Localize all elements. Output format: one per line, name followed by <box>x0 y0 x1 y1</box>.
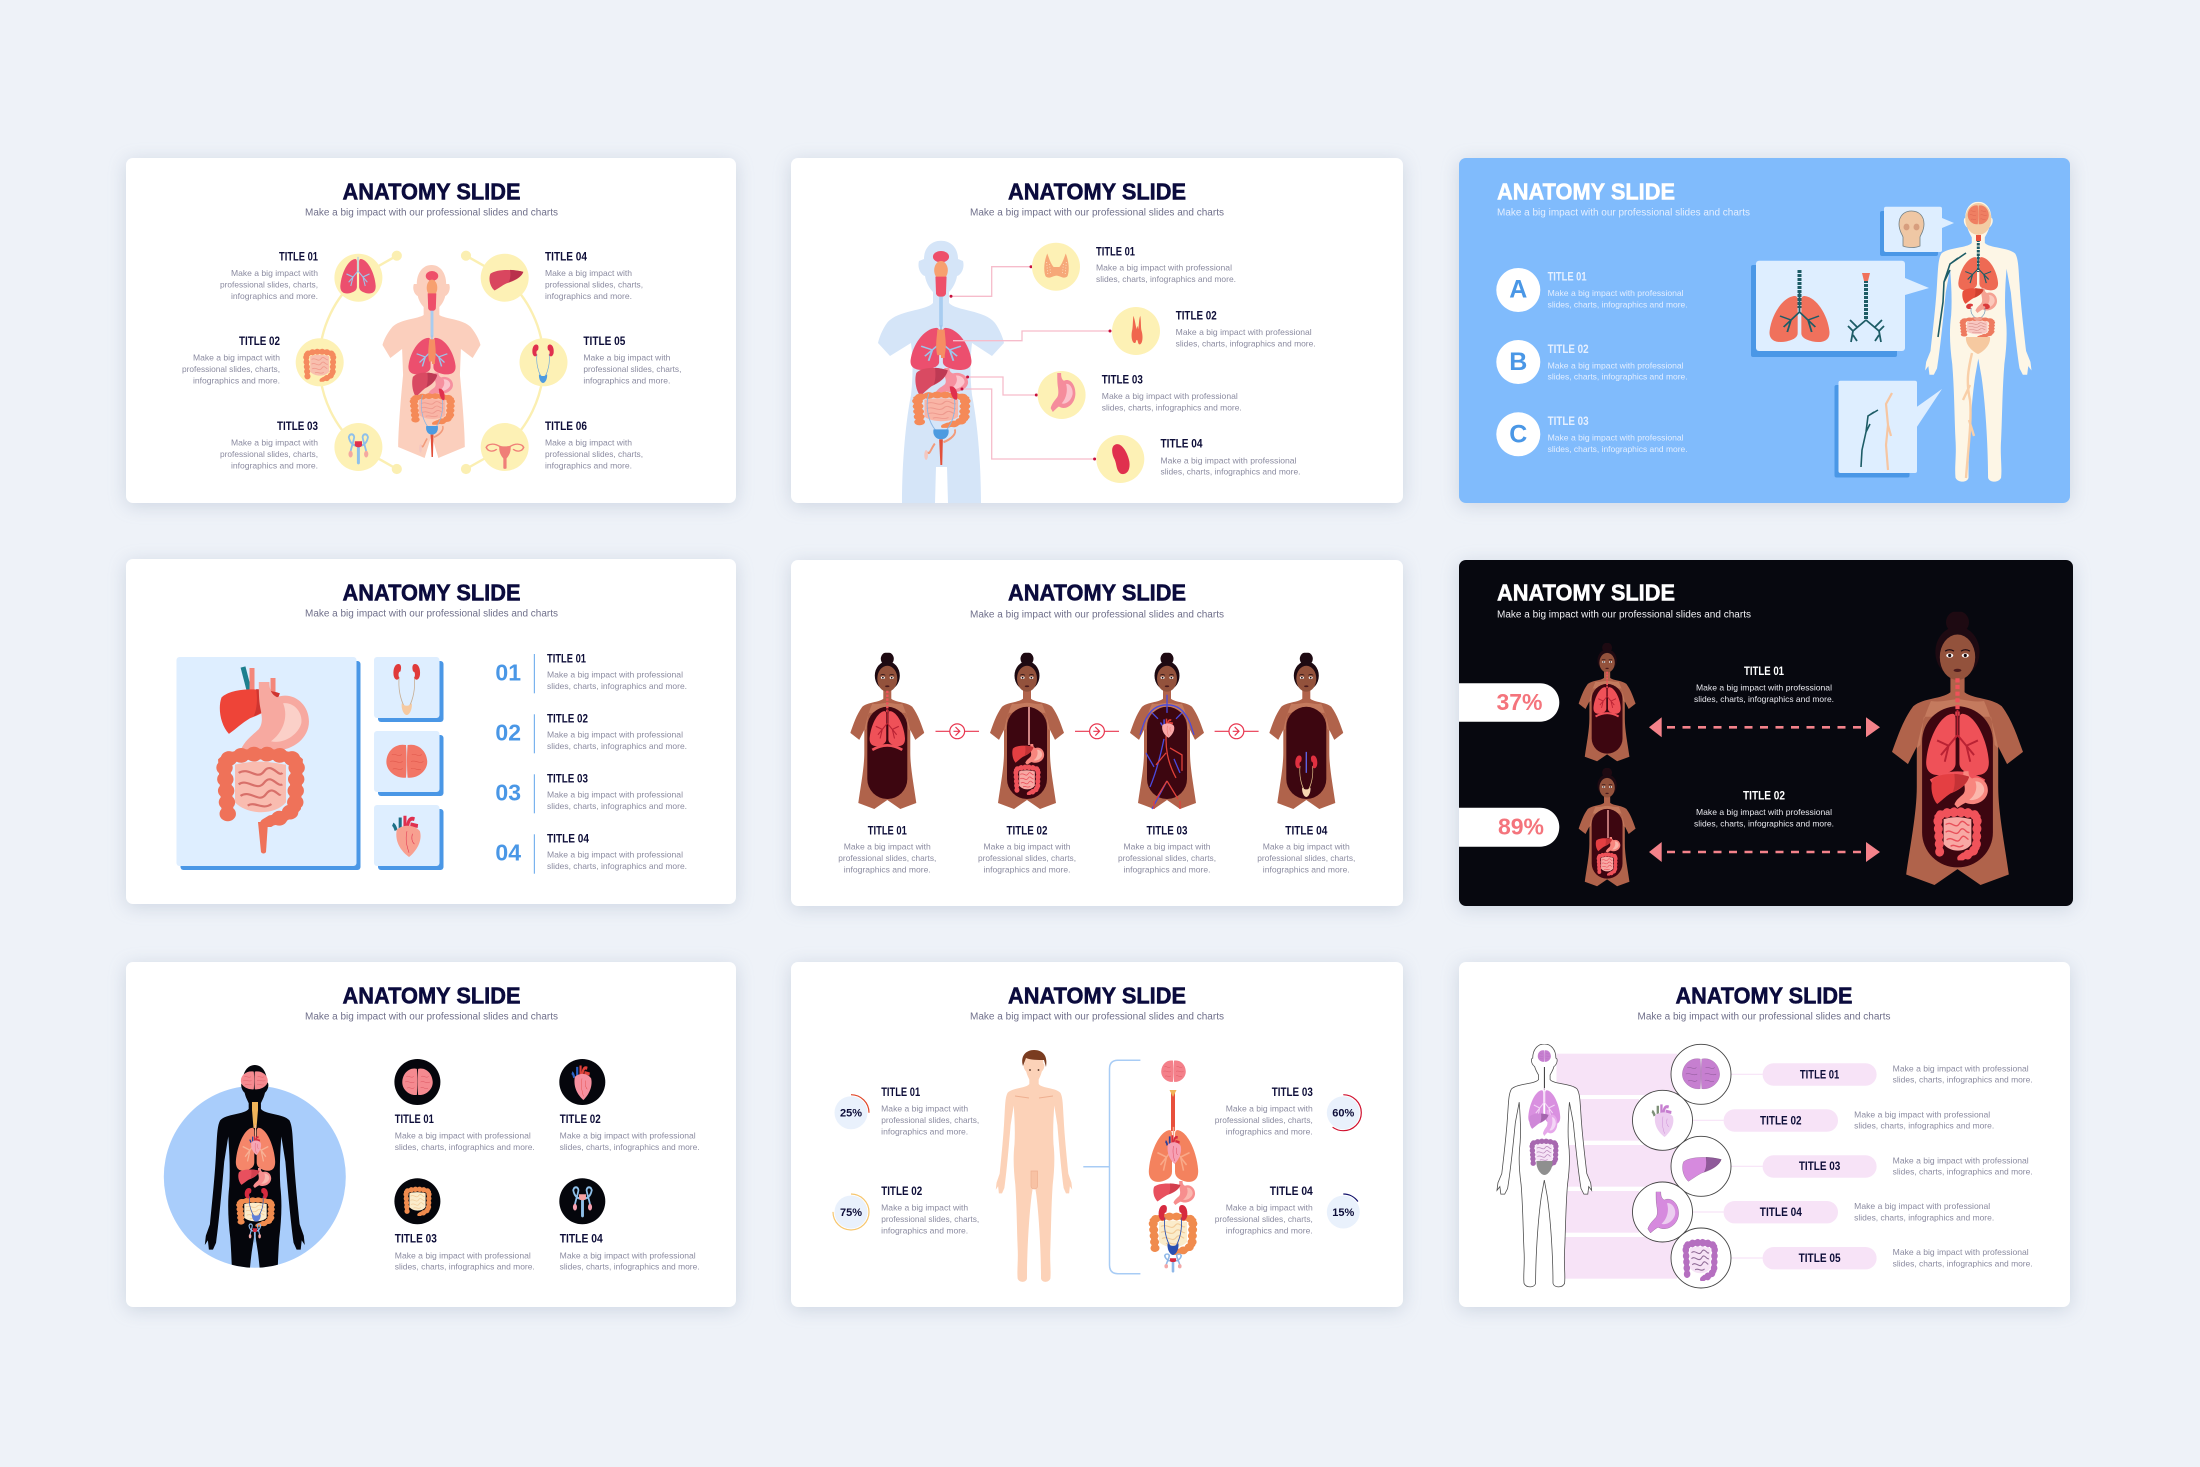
icon: trachea lobes <box>1112 307 1160 355</box>
icon: heart <box>1632 1090 1692 1150</box>
stat pill 37% <box>1459 683 1559 722</box>
list item 04: TITLE 04 <box>547 831 589 845</box>
icon: spleen <box>1096 435 1144 483</box>
text: title 02: infographics and more. <box>193 376 280 386</box>
subtitle: Make a big impact with our professional slides and charts <box>970 208 1224 219</box>
central figure with organs <box>382 265 480 458</box>
text: title 06: infographics and more. <box>545 460 632 470</box>
gauge 25% <box>833 1095 869 1131</box>
stat pill 37%: 37% <box>1496 689 1543 715</box>
text: title 03: professional slides, charts, <box>1118 853 1216 863</box>
list item 02: 02 <box>495 720 521 746</box>
text: title 01 <box>838 823 936 875</box>
text: title 02: Make a big impact with professional <box>560 1131 696 1141</box>
badge B with text: B <box>1509 348 1527 376</box>
double arrow 2 <box>1649 842 1880 862</box>
text: title 03: TITLE 03 <box>1102 373 1143 387</box>
text: title 03: professional slides, charts, <box>1215 1115 1313 1125</box>
panel: slide 9 purple list <box>1459 962 2070 1307</box>
text: title 03: TITLE 03 <box>395 1231 437 1245</box>
text row 5: Make a big impact with professional <box>1893 1247 2029 1257</box>
text: title 01: infographics and more. <box>231 291 318 301</box>
icon: male reproductive <box>559 1178 605 1224</box>
pill title 03 <box>1763 1155 1877 1178</box>
badge A with text <box>1496 268 1688 312</box>
text row 1: slides, charts, infographics and more. <box>1893 1075 2033 1085</box>
text: title 03: Make a big impact with <box>1226 1104 1313 1114</box>
text: title 04: infographics and more. <box>1263 865 1350 875</box>
text: title 04: Make a big impact with <box>545 268 632 278</box>
text row 2: slides, charts, infographics and more. <box>1854 1121 1994 1131</box>
text: title 02 <box>182 334 280 386</box>
text: title 01: professional slides, charts, <box>838 853 936 863</box>
text: title 04: professional slides, charts, <box>1215 1214 1313 1224</box>
list item 04: Make a big impact with professional <box>547 850 683 860</box>
list item 02 <box>495 711 687 753</box>
text: title 01: Make a big impact with <box>231 268 318 278</box>
organ stack <box>1149 1060 1198 1273</box>
text: title 02 <box>978 823 1076 875</box>
text: title 01: Make a big impact with <box>881 1104 969 1114</box>
text row 1: Make a big impact with professional <box>1893 1063 2029 1073</box>
arrow 3 <box>1215 724 1259 739</box>
text: title 02: TITLE 02 <box>1743 789 1785 803</box>
list item 01 <box>495 651 687 693</box>
text: title 02: slides, charts, infographics and more. <box>1176 338 1316 348</box>
badge A with text: slides, charts, infographics and more. <box>1548 299 1688 309</box>
text: title 06 <box>545 419 643 470</box>
text: title 03: infographics and more. <box>231 460 318 470</box>
text: title 03: Make a big impact with professional <box>1102 391 1238 401</box>
text: title 02: TITLE 02 <box>560 1112 601 1126</box>
text row 3 <box>1893 1155 2033 1177</box>
gauge 25%: 25% <box>840 1108 862 1120</box>
text: title 03: TITLE 03 <box>277 419 318 433</box>
text row 3: Make a big impact with professional <box>1893 1155 2029 1165</box>
double arrow 1 <box>1649 717 1880 737</box>
list item 01: 01 <box>495 660 521 686</box>
pill title 03: TITLE 03 <box>1799 1159 1841 1173</box>
text: title 04: professional slides, charts, <box>545 279 643 289</box>
icon: stomach <box>1038 371 1086 419</box>
badge B with text: TITLE 02 <box>1548 342 1589 356</box>
figure: digestive <box>990 652 1064 809</box>
yellow ring with connector dots <box>319 251 544 474</box>
text: title 02: Make a big impact with <box>984 842 1071 852</box>
pill title 02: TITLE 02 <box>1760 1113 1802 1127</box>
pill title 01: TITLE 01 <box>1800 1067 1840 1081</box>
subtitle: Make a big impact with our professional slides and charts <box>1497 208 1750 219</box>
text: title 03 <box>395 1231 535 1272</box>
subtitle: Make a big impact with our professional slides and charts <box>1497 610 1751 621</box>
text row 4: slides, charts, infographics and more. <box>1854 1212 1994 1222</box>
text row 1 <box>1893 1063 2033 1085</box>
icon: colon <box>296 338 344 386</box>
arrow 1 <box>936 724 979 739</box>
gauge 15%: 15% <box>1332 1207 1355 1219</box>
list item 02: slides, charts, infographics and more. <box>547 741 687 751</box>
text: title 01: TITLE 01 <box>395 1112 434 1126</box>
icon: liver <box>481 254 529 302</box>
text: title 02: slides, charts, infographics and more. <box>560 1142 700 1152</box>
text: title 04: slides, charts, infographics and more. <box>1160 466 1300 476</box>
text: title 04: infographics and more. <box>545 291 632 301</box>
small figure: lungs <box>1579 643 1636 761</box>
icon: colon <box>394 1178 440 1224</box>
gauge 75%: 75% <box>840 1207 862 1219</box>
text: title 05: professional slides, charts, <box>583 364 681 374</box>
text: title 01: infographics and more. <box>844 865 931 875</box>
badge B with text: slides, charts, infographics and more. <box>1548 372 1688 382</box>
text: title 06: Make a big impact with <box>545 437 632 447</box>
text: title 01 <box>220 250 318 301</box>
pill title 05: TITLE 05 <box>1799 1251 1841 1265</box>
text: title 04 <box>1215 1184 1313 1236</box>
icon: kidneys <box>520 338 568 386</box>
gauge 75% <box>833 1194 869 1230</box>
icon: lungs <box>334 254 382 302</box>
list item 02: TITLE 02 <box>547 711 588 725</box>
text: title 03 <box>1215 1085 1313 1137</box>
text: title 01: Make a big impact with professional <box>1696 682 1832 692</box>
text: title 01: TITLE 01 <box>1744 664 1784 678</box>
blue body with organs <box>878 241 1004 503</box>
text: title 04: Make a big impact with <box>1263 842 1350 852</box>
text: title 04 <box>1257 823 1355 875</box>
panel: slide 6 dark percentages <box>1459 560 2073 906</box>
outline body with purple organs <box>1497 1044 1592 1287</box>
pill title 02 <box>1724 1109 1838 1132</box>
pill title 05 <box>1763 1247 1877 1269</box>
text: title 04: Make a big impact with <box>1226 1203 1313 1213</box>
list item 04 <box>495 831 687 874</box>
list item 01: TITLE 01 <box>547 651 586 665</box>
pill title 01 <box>1763 1063 1877 1086</box>
text row 5 <box>1893 1247 2033 1268</box>
title: ANATOMY SLIDE <box>1497 178 1675 204</box>
text: title 01: slides, charts, infographics and more. <box>1694 694 1834 704</box>
text: title 03: Make a big impact with <box>231 437 318 447</box>
arrow 2 <box>1075 724 1119 739</box>
list item 04: slides, charts, infographics and more. <box>547 861 687 871</box>
text: title 02: Make a big impact with <box>193 353 280 363</box>
text: title 01: Make a big impact with professional <box>1096 263 1232 273</box>
text: title 01: slides, charts, infographics and more. <box>395 1142 535 1152</box>
text: title 02: TITLE 02 <box>1006 823 1048 837</box>
callout: lungs and bronchi <box>1751 261 1929 357</box>
text: title 04: Make a big impact with professional <box>560 1250 696 1260</box>
list item 01: slides, charts, infographics and more. <box>547 681 687 691</box>
text: title 02 <box>1694 789 1834 829</box>
text: title 03: infographics and more. <box>1226 1127 1313 1137</box>
text: title 01: TITLE 01 <box>1096 244 1135 258</box>
title: ANATOMY SLIDE <box>1008 178 1186 204</box>
text: title 02: Make a big impact with professional <box>1176 327 1312 337</box>
callout: skull <box>1880 207 1954 256</box>
panel: slide 1 organ ring <box>126 158 736 503</box>
large organ card <box>176 657 360 870</box>
text: title 03 <box>220 419 318 470</box>
text: title 04: TITLE 04 <box>560 1231 603 1245</box>
small card: kidneys <box>374 657 444 722</box>
text: title 02: Make a big impact with professional <box>1696 807 1832 817</box>
text: title 02 <box>1176 309 1316 348</box>
text: title 05: infographics and more. <box>583 376 670 386</box>
text: title 02: infographics and more. <box>881 1226 968 1236</box>
list item 03: Make a big impact with professional <box>547 790 683 800</box>
panel: slide 4 digestive organs <box>126 559 736 904</box>
text: title 02 <box>881 1184 979 1236</box>
text: title 04: TITLE 04 <box>1270 1184 1313 1198</box>
text: title 01: slides, charts, infographics and more. <box>1096 274 1236 284</box>
stat pill 89%: 89% <box>1498 813 1544 839</box>
connectors <box>1692 1074 1763 1258</box>
list item 03: TITLE 03 <box>547 771 588 785</box>
subtitle: Make a big impact with our professional slides and charts <box>305 208 558 219</box>
text row 5: slides, charts, infographics and more. <box>1893 1258 2033 1268</box>
icon: uterus <box>481 423 529 471</box>
list item 03: slides, charts, infographics and more. <box>547 801 687 811</box>
title: ANATOMY SLIDE <box>342 580 520 606</box>
text: title 01 <box>1096 244 1236 284</box>
subtitle: Make a big impact with our professional slides and charts <box>305 1012 558 1023</box>
text: title 05 <box>583 334 681 386</box>
badge C with text: TITLE 03 <box>1548 414 1589 428</box>
text row 3: slides, charts, infographics and more. <box>1893 1167 2033 1177</box>
panel: slide 8 gauges and bracket <box>791 962 1403 1307</box>
badge C with text: slides, charts, infographics and more. <box>1548 444 1688 454</box>
text: title 02: TITLE 02 <box>1176 309 1217 323</box>
list item 04: 04 <box>495 840 521 866</box>
text: title 02: professional slides, charts, <box>881 1214 979 1224</box>
badge B with text: Make a big impact with professional <box>1548 360 1684 370</box>
text: title 04: Make a big impact with professional <box>1160 455 1297 465</box>
subtitle: Make a big impact with our professional slides and charts <box>970 610 1224 621</box>
list item 03: 03 <box>495 780 521 806</box>
text: title 04: infographics and more. <box>1226 1226 1313 1236</box>
gauge 60% <box>1325 1095 1361 1131</box>
title: ANATOMY SLIDE <box>342 178 520 204</box>
text: title 03 <box>1102 373 1242 412</box>
leader lines <box>950 265 1112 460</box>
text: title 01: Make a big impact with <box>844 842 931 852</box>
text row 2: Make a big impact with professional <box>1854 1109 1990 1119</box>
text: title 02: Make a big impact with <box>881 1203 969 1213</box>
text: title 03: TITLE 03 <box>1146 823 1188 837</box>
small card: brain <box>374 731 444 796</box>
icon: thyroid <box>1032 243 1080 291</box>
text: title 01 <box>881 1085 979 1137</box>
text: title 03 <box>1118 823 1216 875</box>
badge B with text <box>1496 340 1688 384</box>
text: title 02: professional slides, charts, <box>182 364 280 374</box>
bracket <box>1083 1060 1140 1274</box>
small figure: digestive <box>1579 768 1636 886</box>
icon: heart <box>559 1059 605 1105</box>
text: title 01: professional slides, charts, <box>881 1115 979 1125</box>
text: title 01 <box>1694 664 1834 704</box>
list item 02: Make a big impact with professional <box>547 730 683 740</box>
badge A with text: A <box>1509 276 1527 304</box>
text: title 02: professional slides, charts, <box>978 853 1076 863</box>
cream full body with organs <box>1925 202 2032 482</box>
gauge 15% <box>1325 1194 1361 1230</box>
pill title 04: TITLE 04 <box>1760 1205 1802 1219</box>
icon: liver <box>1671 1136 1731 1196</box>
subtitle: Make a big impact with our professional slides and charts <box>1638 1012 1890 1023</box>
title: ANATOMY SLIDE <box>1008 580 1186 606</box>
text row 4 <box>1854 1201 1994 1222</box>
panel: slide 5 four female figures <box>791 560 1403 906</box>
text: title 01: professional slides, charts, <box>220 279 318 289</box>
text: title 01 <box>395 1112 535 1152</box>
text: title 05: TITLE 05 <box>583 334 626 348</box>
badge C with text: C <box>1509 420 1527 448</box>
gauge 60%: 60% <box>1332 1108 1355 1120</box>
text: title 02 <box>560 1112 700 1152</box>
text: title 01: TITLE 01 <box>279 250 318 264</box>
text: title 01: infographics and more. <box>881 1127 968 1137</box>
text: title 01: TITLE 01 <box>868 823 907 837</box>
list item 03 <box>495 771 687 813</box>
badge C with text: Make a big impact with professional <box>1548 433 1684 443</box>
text: title 04 <box>1160 437 1300 476</box>
badge A with text: Make a big impact with professional <box>1548 288 1684 298</box>
icon: brain <box>394 1059 440 1105</box>
male figure <box>996 1050 1072 1282</box>
text: title 02: slides, charts, infographics and more. <box>1694 819 1834 829</box>
title: ANATOMY SLIDE <box>1676 982 1852 1008</box>
text: title 03: Make a big impact with <box>1124 842 1211 852</box>
callout: nerves <box>1834 381 1942 478</box>
text: title 05: Make a big impact with <box>583 353 671 363</box>
text: title 04 <box>560 1231 700 1272</box>
text: title 04: professional slides, charts, <box>1257 853 1355 863</box>
text: title 02: TITLE 02 <box>239 334 280 348</box>
text: title 04 <box>545 250 643 301</box>
text: title 01: Make a big impact with professional <box>395 1131 531 1141</box>
pill title 04 <box>1724 1201 1838 1223</box>
icon: brain <box>1671 1044 1731 1104</box>
panel: slide 2 leader lines <box>791 158 1403 503</box>
icon: colon <box>1671 1228 1731 1288</box>
list item 01: Make a big impact with professional <box>547 670 683 680</box>
icon: stomach <box>1632 1182 1692 1242</box>
text: title 01: TITLE 01 <box>881 1085 920 1099</box>
stat pill 89% <box>1459 808 1559 847</box>
pink bands <box>1556 1054 1677 1279</box>
figure: circulatory <box>1130 652 1204 809</box>
text: title 06: TITLE 06 <box>545 419 587 433</box>
text: title 02: infographics and more. <box>984 865 1070 875</box>
text: title 03: TITLE 03 <box>1272 1085 1313 1099</box>
subtitle: Make a big impact with our professional slides and charts <box>305 609 558 620</box>
title: ANATOMY SLIDE <box>342 982 520 1008</box>
text: title 03: professional slides, charts, <box>220 449 318 459</box>
badge C with text <box>1496 412 1688 456</box>
text: title 03: slides, charts, infographics and more. <box>1102 402 1242 412</box>
text: title 03: slides, charts, infographics and more. <box>395 1262 535 1272</box>
text: title 03: infographics and more. <box>1124 865 1210 875</box>
text: title 04: TITLE 04 <box>1285 823 1328 837</box>
text: title 04: TITLE 04 <box>545 250 587 264</box>
title: ANATOMY SLIDE <box>1008 982 1186 1008</box>
figure: urinary <box>1269 652 1343 809</box>
title: ANATOMY SLIDE <box>1497 580 1675 606</box>
text row 4: Make a big impact with professional <box>1854 1201 1990 1211</box>
subtitle: Make a big impact with our professional slides and charts <box>970 1012 1224 1023</box>
blue disc with silhouette and organs <box>164 1065 346 1268</box>
large figure <box>1892 611 2023 885</box>
text: title 04: TITLE 04 <box>1160 437 1203 451</box>
panel: slide 7 silhouette <box>126 962 736 1364</box>
text: title 04: slides, charts, infographics and more. <box>560 1262 700 1272</box>
figure: respiratory <box>850 652 924 809</box>
text: title 06: professional slides, charts, <box>545 449 643 459</box>
icon: male reproductive <box>334 423 382 471</box>
badge A with text: TITLE 01 <box>1548 269 1587 283</box>
small card: heart <box>374 805 444 870</box>
panel: slide 3 blue callouts <box>1459 158 2070 503</box>
text: title 02: TITLE 02 <box>881 1184 922 1198</box>
text: title 03: Make a big impact with professional <box>395 1250 531 1260</box>
text row 2 <box>1854 1109 1994 1131</box>
